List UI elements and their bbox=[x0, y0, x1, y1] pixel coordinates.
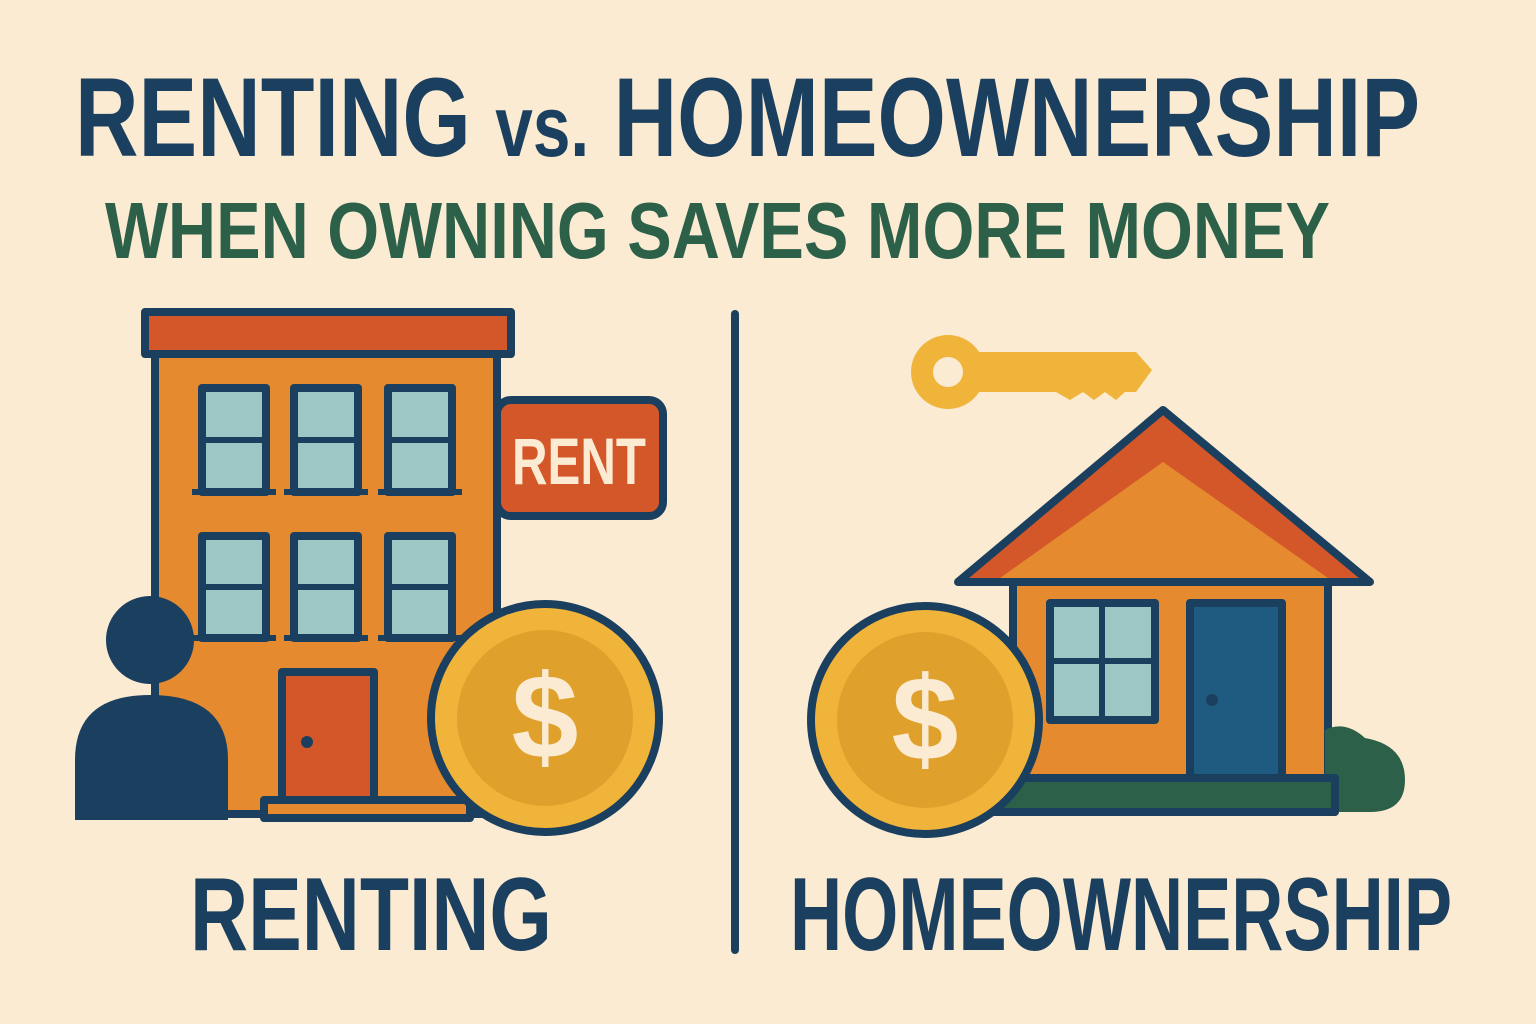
divider bbox=[731, 314, 739, 950]
sign: RENT bbox=[497, 400, 663, 516]
sign: RENT: RENT bbox=[512, 424, 646, 498]
icon: person bbox=[75, 596, 228, 820]
illustration: house bbox=[958, 410, 1405, 812]
icon: coin left: $ bbox=[512, 650, 578, 784]
icon: key bbox=[911, 335, 1152, 409]
illustration: apartment building bbox=[145, 312, 511, 818]
label: RENTING: RENTING bbox=[190, 857, 552, 973]
icon: coin left bbox=[431, 604, 659, 832]
icon: coin right: $ bbox=[892, 652, 958, 786]
subtitle: WHEN OWNING SAVES MORE MONEY bbox=[105, 186, 1330, 275]
icon: coin right bbox=[811, 606, 1039, 834]
